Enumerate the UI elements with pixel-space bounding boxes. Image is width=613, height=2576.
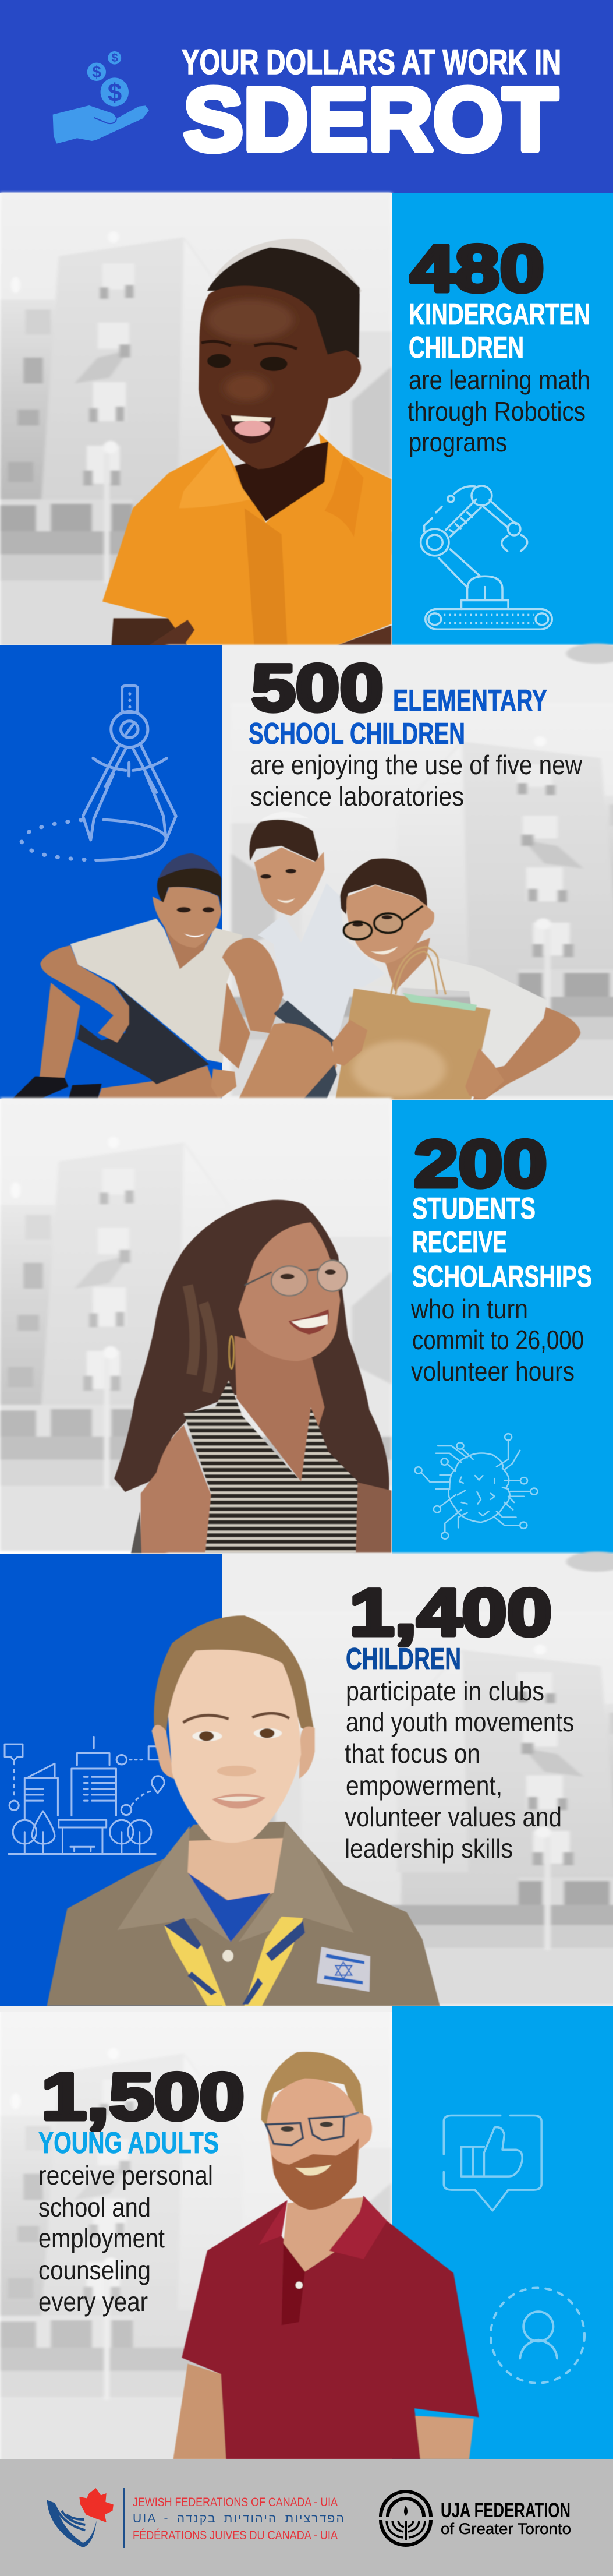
text block: description: counseling: [38, 2255, 151, 2285]
text block: description: participate in clubs: [346, 1676, 544, 1706]
icon: hand with falling coins: $: [92, 63, 101, 81]
middle boy: [222, 812, 385, 1099]
text block: description: every year: [38, 2286, 148, 2317]
panel: young adults: [0, 2006, 613, 2462]
heading: students receive scholarships: [412, 1192, 592, 1294]
heading: elementary school children: SCHOOL CHILDREN: [249, 717, 465, 751]
logo: Jewish Federations of Canada - UIA: [47, 2488, 345, 2548]
icon: circuit brain: [415, 1434, 537, 1539]
footer: partner logos: [0, 2459, 613, 2576]
text block: description: [250, 750, 583, 811]
text block: description: [38, 2160, 213, 2317]
photo background: building (mirrored): [167, 644, 613, 1100]
icon: hand with falling coins: $: [111, 52, 118, 65]
heading: kindergarten children: CHILDREN: [409, 331, 524, 365]
panel: children in clubs and youth movements: [0, 1552, 613, 2008]
heading: 200: 200: [414, 1127, 547, 1201]
text block: description: programs: [409, 427, 507, 457]
text block: description: receive personal: [38, 2160, 213, 2190]
icon: maple leaf and menorah swoosh: [47, 2488, 114, 2547]
text block: description: empowerment,: [346, 1770, 502, 1801]
logo: UJA Federation of Greater Toronto: UJA FEDERATION: [441, 2499, 571, 2522]
icon: hand with falling coins: $: [108, 79, 122, 107]
left boy: [12, 853, 250, 1099]
photo: smiling man: [173, 2052, 479, 2459]
logo: Jewish Federations of Canada - UIA: FÉDÉRATIONS JUIVES DU CANADA - UIA: [133, 2529, 338, 2542]
photo: girl in scout uniform: [47, 1615, 440, 2006]
photo: smiling woman: [114, 1200, 391, 1553]
logo: UJA Federation of Greater Toronto: of Greater Toronto: [441, 2520, 571, 2538]
heading: 1,500: 1,500: [41, 2060, 245, 2134]
blue side panel: [392, 193, 613, 645]
icon: drawing compass: [22, 686, 176, 860]
text block: description: volunteer values and: [345, 1802, 562, 1832]
photo background: building: [0, 2009, 392, 2462]
icon: city skyline: [5, 1737, 164, 1854]
text block: description: leadership skills: [345, 1833, 513, 1864]
text block: description: commit to 26,000: [412, 1325, 584, 1355]
panel: elementary school children: [0, 644, 613, 1100]
blue side panel: [0, 1554, 222, 2006]
text block: description: science laboratories: [250, 781, 464, 811]
text block: description: [410, 1294, 584, 1386]
panel: kindergarten children: [0, 192, 613, 645]
blue side panel: [392, 1100, 613, 1554]
panel: students receive scholarships: [0, 1098, 613, 1554]
title: Sderot: SDEROT: [183, 69, 558, 170]
right boy: [332, 858, 580, 1099]
blue side panel: [392, 2006, 613, 2459]
photo background: building: [0, 1098, 392, 1551]
heading: young adults: YOUNG ADULTS: [38, 2126, 219, 2160]
logo: Jewish Federations of Canada - UIA: JEWISH FEDERATIONS OF CANADA - UIA: [133, 2496, 338, 2509]
logo: Jewish Federations of Canada - UIA: UIA - הפדרציות היהודיות בקנדה: [133, 2512, 345, 2525]
heading: students receive scholarships: RECEIVE: [412, 1226, 507, 1259]
blue side panel: [0, 645, 222, 1099]
logo: UJA Federation of Greater Toronto: [381, 2492, 571, 2545]
text block: description: employment: [38, 2223, 165, 2253]
text block: description: [408, 365, 590, 457]
icon: robot arm: [421, 486, 552, 629]
text block: description: are learning math: [409, 365, 590, 395]
icon: thumbs up speech bubble: [444, 2116, 541, 2211]
text block: description: through Robotics: [408, 396, 586, 426]
icon: menorah emblem: [381, 2492, 431, 2545]
photo: three boys: [12, 812, 580, 1099]
heading: 500: 500: [251, 651, 384, 725]
heading: children: CHILDREN: [346, 1642, 461, 1676]
heading: 480: 480: [410, 232, 544, 306]
text block: description: volunteer hours: [411, 1356, 575, 1386]
heading: elementary school children: [249, 684, 547, 751]
text block: description: and youth movements: [346, 1707, 574, 1737]
heading: students receive scholarships: STUDENTS: [412, 1192, 536, 1226]
text block: description: school and: [38, 2192, 151, 2222]
photo background: building (mirrored): [167, 1552, 613, 2008]
text block: description: that focus on: [345, 1738, 480, 1769]
heading: kindergarten children: [409, 298, 590, 365]
heading: elementary school children: ELEMENTARY: [393, 684, 547, 718]
text block: description: [345, 1676, 574, 1864]
heading: 1,400: 1,400: [349, 1576, 552, 1650]
text block: description: who in turn: [410, 1294, 528, 1324]
icon: person in dashed circle: [491, 2288, 584, 2383]
header banner: [0, 0, 613, 193]
icon: hand with falling coins: [53, 51, 149, 144]
photo background: building: [0, 192, 392, 645]
photo: smiling boy: [102, 239, 391, 645]
